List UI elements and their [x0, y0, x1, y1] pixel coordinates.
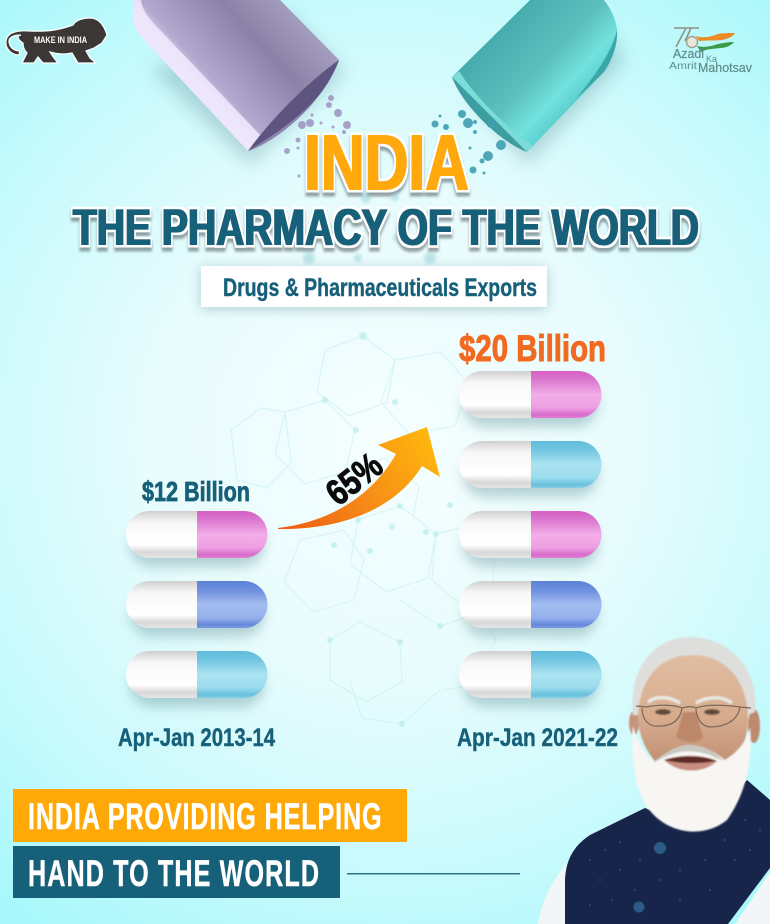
capsule pink: [459, 511, 601, 567]
capsule blue: [459, 581, 601, 637]
beard: [632, 726, 751, 832]
nose: [676, 712, 703, 742]
head group: [629, 637, 760, 832]
eyebrows: [648, 698, 732, 703]
banner: Hand to the world: HAND TO THE WORLD: [28, 852, 319, 894]
hair: [632, 637, 755, 715]
growth label: 65%: 65%: [318, 444, 390, 513]
banner: India providing helping: INDIA PROVIDING HELPING: [28, 795, 382, 837]
logo: Make in India lion: [6, 18, 107, 63]
title: INDIA: INDIA: [304, 118, 469, 207]
column: 2021-22 capsules: [459, 371, 601, 707]
value label: $20 Billion: $20 Billion: [459, 328, 606, 369]
logo: Azadi Ka Amrit Mahotsav: Mahotsav: [698, 60, 752, 75]
banner rule: [347, 873, 520, 874]
column: 2013-14 capsules: [126, 511, 267, 707]
capsule half: violet: [133, 0, 345, 165]
vest dots: [589, 819, 761, 906]
capsule half: teal: [452, 0, 625, 165]
vest: [565, 780, 770, 924]
logo: Azadi Ka Amrit Mahotsav: [669, 28, 752, 75]
period label: 2013-14: Apr-Jan 2013-14: [118, 724, 275, 752]
logo: Azadi Ka Amrit Mahotsav: Azadi: [673, 46, 704, 61]
growth arrow: [278, 427, 440, 529]
subtitle text: Drugs & Pharmaceuticals Exports: [223, 274, 537, 302]
powder particles: teal: [432, 110, 506, 174]
moustache: [653, 745, 724, 763]
logo text: MAKE IN INDIA: [34, 35, 87, 46]
subtitle panel: [201, 266, 547, 309]
logo: Azadi Ka Amrit Mahotsav: Ka: [706, 54, 717, 64]
ears: [629, 711, 639, 735]
eyes: [655, 709, 671, 715]
capsule cyan: [126, 651, 267, 707]
face: [638, 655, 748, 790]
faint droplets behind heading: [303, 193, 436, 264]
vest buttons: [654, 842, 666, 854]
capsule blue: [126, 581, 267, 637]
capsule pink: [126, 511, 267, 567]
white kurta: [538, 862, 770, 924]
period label: 2021-22: Apr-Jan 2021-22: [457, 724, 618, 752]
capsule pink: [459, 371, 601, 427]
lips: [664, 756, 717, 771]
powder particles: violet: [284, 95, 351, 178]
capsule cyan: [459, 441, 601, 497]
value label: $12 Billion: $12 Billion: [142, 476, 250, 507]
capsule cyan: [459, 651, 601, 707]
logo: Azadi Ka Amrit Mahotsav: Amrit: [669, 61, 697, 72]
glasses: [636, 705, 751, 727]
portrait: [538, 637, 770, 924]
hexagon network pattern: [231, 336, 496, 724]
